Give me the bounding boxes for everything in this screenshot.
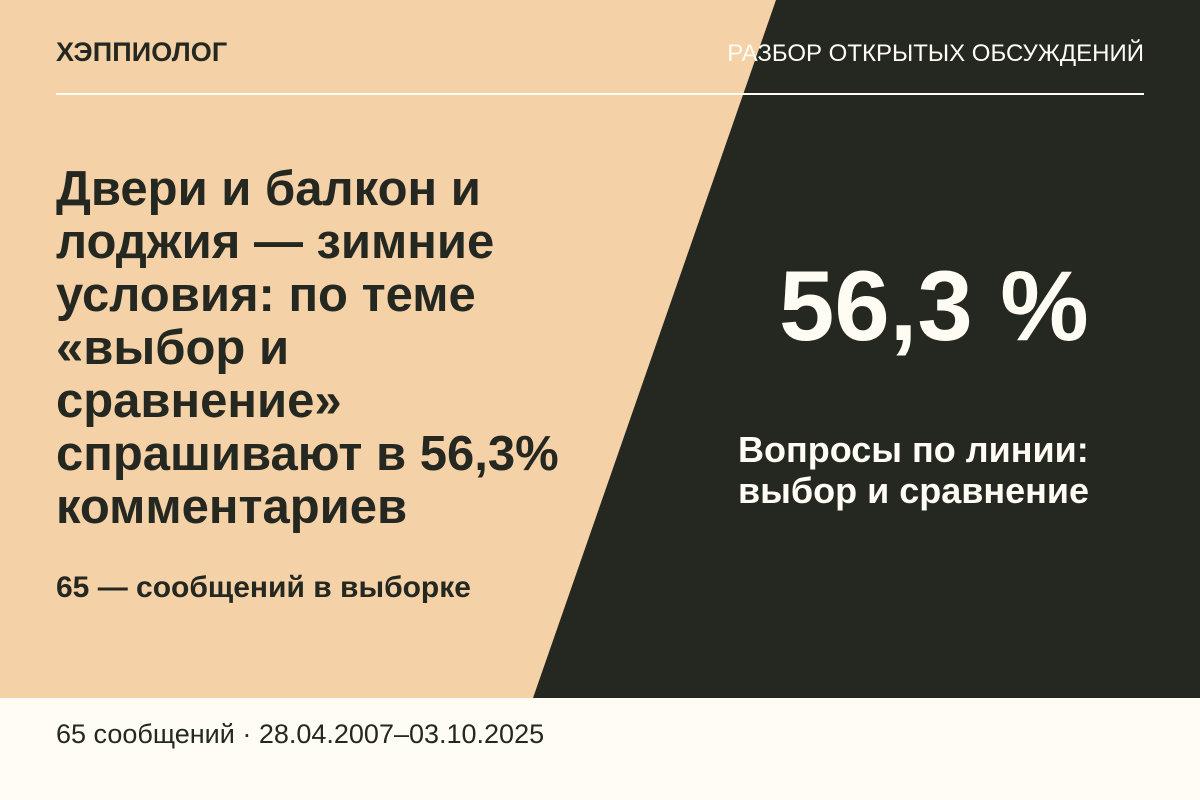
main heading: «выбор и xyxy=(56,321,289,375)
brand name: ХЭППИОЛОГ xyxy=(56,37,227,67)
percentage caption: выбор и сравнение xyxy=(738,470,1089,511)
main heading: сравнение» xyxy=(56,374,342,428)
main heading: лоджия — зимние xyxy=(56,215,494,269)
big percentage: 56,3 % xyxy=(779,251,1089,362)
main heading: Двери и балкон и xyxy=(56,162,481,216)
main heading xyxy=(56,162,559,534)
sample size note: 65 — сообщений в выборке xyxy=(56,571,471,604)
main heading: спрашивают в 56,3% xyxy=(56,427,559,481)
main heading: условия: по теме xyxy=(56,268,476,322)
percentage caption xyxy=(738,429,1089,511)
footer text: 65 сообщений · 28.04.2007–03.10.2025 xyxy=(56,719,544,749)
percentage caption: Вопросы по линии: xyxy=(738,429,1089,470)
main heading: комментариев xyxy=(56,480,407,534)
section label: РАЗБОР ОТКРЫТЫХ ОБСУЖДЕНИЙ xyxy=(727,40,1144,67)
